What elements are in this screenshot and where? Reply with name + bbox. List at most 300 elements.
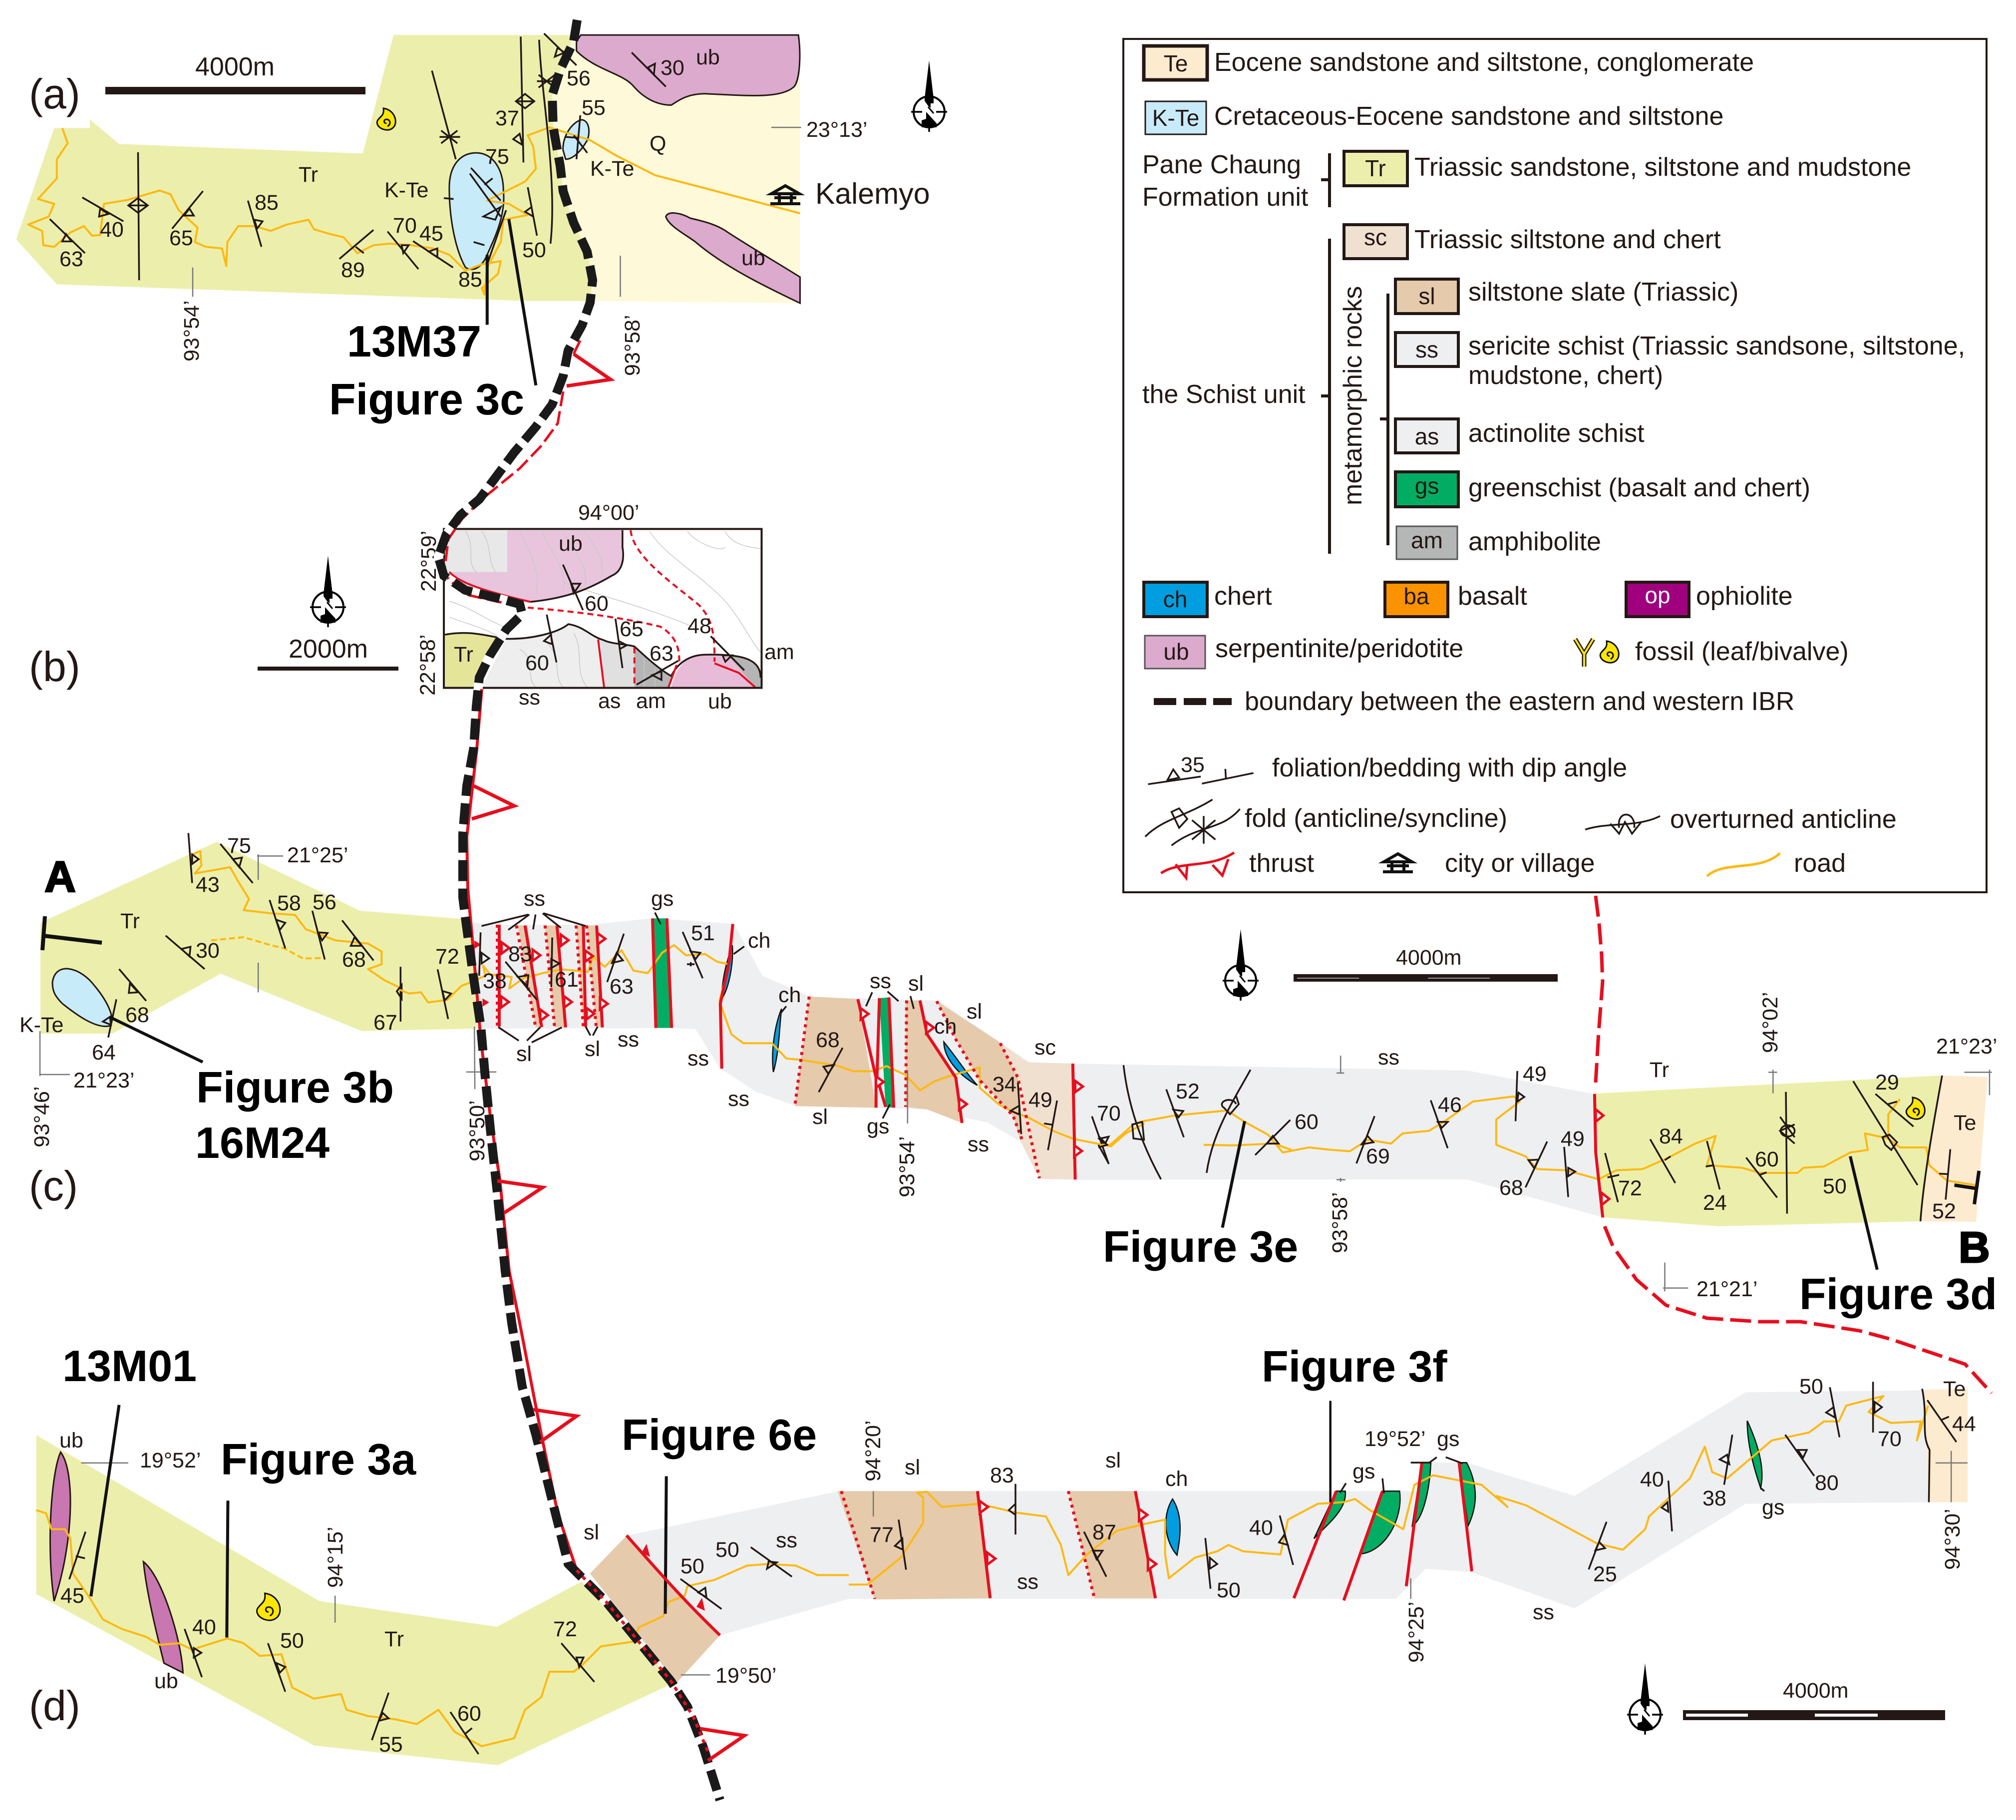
map labels (a): 93°54’ (180, 301, 204, 362)
white casing at inset (438, 452, 522, 707)
siltstone slate blocks (838, 1491, 1155, 1599)
icon: bivalve fossil (1600, 641, 1619, 663)
serpentinite lenses (50, 1452, 183, 1673)
map labels (d): gs (1762, 1495, 1784, 1519)
map labels (d): ss (1533, 1600, 1554, 1624)
map labels (d): 80 (1815, 1471, 1839, 1495)
map labels (a): ub (741, 246, 765, 270)
map labels (c): 43 (196, 873, 220, 897)
thrust teeth on main line (474, 941, 489, 1007)
map labels (c): 21°23’ (1936, 1035, 1997, 1059)
section end B (1955, 1171, 1979, 1204)
map labels (c): 60 (1295, 1110, 1319, 1134)
strike and dip symbols west (103, 833, 401, 1038)
map labels (d): 40 (1640, 1467, 1664, 1491)
legend text: Cretaceous-Eocene sandstone and siltstone (1214, 102, 1723, 131)
leader lines (1222, 1121, 1877, 1270)
map labels (a): 30 (661, 56, 684, 80)
swatch am (1396, 526, 1457, 559)
legend frame (1123, 39, 1987, 892)
map labels (c): 68 (342, 948, 366, 972)
solid thrusts (499, 918, 1075, 1179)
legend text: foliation/bedding with dip angle (1272, 753, 1627, 782)
section end A (42, 916, 102, 950)
map labels (b): as (598, 689, 621, 713)
swatch op: op (1645, 582, 1671, 608)
legend text: basalt (1458, 582, 1527, 611)
panel (c): central cross-section route (19, 833, 1997, 1319)
map labels (c): ss (1378, 1046, 1399, 1070)
map labels (c) (19, 834, 1997, 1301)
map labels (b): am (636, 689, 666, 713)
boundary between eastern and western IBR with thrust (438, 20, 744, 1800)
legend text: sericite schist (Triassic sandsone, siltstone, (1468, 332, 1965, 361)
serpentinite area (449, 530, 623, 602)
unit heading: the Schist unit (1142, 380, 1306, 409)
swatch K-Te (1145, 101, 1206, 134)
dashed faults (841, 1491, 1094, 1599)
map labels (c): ss (618, 1028, 639, 1052)
map labels (a): 56 (567, 66, 591, 90)
greenschist lenses (1314, 1421, 1762, 1554)
map labels (c): 49 (1561, 1127, 1585, 1151)
map labels (c): sl (908, 972, 924, 996)
symbol: thrust (1161, 852, 1234, 878)
siltstone and chert block (1001, 1043, 1075, 1179)
map labels (d): 19°50’ (715, 1664, 776, 1688)
Triassic area (445, 633, 506, 687)
panel label (a): (a) (29, 70, 80, 117)
map labels (c): 83 (508, 942, 532, 966)
map labels (a): 45 (419, 222, 443, 246)
map labels (c): sl (967, 1000, 982, 1024)
legend text: 35 (1181, 753, 1205, 777)
grid ticks and leader (40, 1031, 70, 1076)
map labels (d): sl (1105, 1449, 1121, 1472)
swatch ba (1385, 582, 1448, 617)
grid ticks (1337, 1056, 1992, 1291)
map labels (a): 55 (582, 96, 606, 120)
legend text: siltstone slate (Triassic) (1468, 278, 1738, 307)
legend text: thrust (1249, 849, 1315, 878)
icon: fossil bivalve (377, 108, 395, 130)
symbol: boundary dashes (1154, 698, 1232, 705)
map labels (d): 60 (457, 1702, 481, 1726)
Triassic area (36, 1435, 674, 1765)
swatch as (1395, 419, 1458, 453)
leader lines (487, 219, 536, 385)
map labels (c): 68 (125, 1003, 149, 1027)
map labels (d): 94°20’ (861, 1421, 885, 1481)
thrust teeth at Figure 6e block (642, 1544, 705, 1611)
map labels (c): 21°23’ (73, 1069, 134, 1092)
map labels (c): 68 (816, 1028, 840, 1052)
map labels (d): 19°52’ (1364, 1427, 1425, 1451)
map labels (c): sl (812, 1105, 828, 1129)
map labels (c): ss (728, 1087, 749, 1111)
map labels (c): 52 (1176, 1080, 1200, 1103)
map labels (a): K-Te (384, 178, 428, 202)
map labels (c): 49 (1028, 1088, 1052, 1112)
map labels (c): 70 (1097, 1101, 1121, 1125)
map labels (c): 69 (1366, 1144, 1390, 1168)
map labels (d): 50 (1799, 1375, 1823, 1399)
map labels (d): ch (1165, 1467, 1188, 1491)
legend text: fossil (leaf/bivalve) (1635, 637, 1849, 666)
map labels (c): ss (524, 887, 545, 911)
swatch gs (1395, 472, 1458, 507)
strike and dip symbols (544, 565, 744, 685)
panel label (c): (c) (29, 1162, 78, 1209)
map labels (a): 93°58’ (621, 315, 645, 376)
map labels (d): 77 (870, 1523, 894, 1547)
map labels (a): 75 (485, 145, 509, 169)
map labels (c): 38 (483, 969, 507, 993)
map labels (c): 94°02’ (1758, 992, 1782, 1053)
map labels (c): 34 (993, 1073, 1016, 1096)
map labels (d) (59, 1375, 1976, 1757)
panel (a): northern route map (16, 33, 947, 424)
map labels (c): Tr (120, 909, 140, 933)
leader lines panel d (91, 1405, 667, 1638)
map labels (a): 37 (495, 106, 519, 130)
thrust east (1595, 1094, 1603, 1217)
legend text: overturned anticline (1670, 805, 1897, 834)
map labels (d): sl (584, 1520, 599, 1544)
figure label 6e: Figure 6e (622, 1410, 817, 1459)
map labels (c): 93°46’ (30, 1087, 54, 1147)
map labels (c): 60 (1755, 1147, 1779, 1171)
strike and dip symbols (50, 33, 666, 280)
scale bar 4000m (105, 52, 365, 94)
legend text: chert (1214, 582, 1272, 611)
map labels (d): 38 (1702, 1486, 1726, 1510)
sample label 16M24: 16M24 (195, 1118, 330, 1167)
siltstone slate block (590, 1535, 720, 1683)
chert lens (1166, 1499, 1180, 1555)
K-Te lens (52, 969, 112, 1027)
figure label 3f: Figure 3f (1262, 1342, 1447, 1391)
Quaternary area (552, 35, 800, 303)
map labels (d): 50 (280, 1629, 304, 1653)
inset frame (444, 529, 761, 688)
map labels (d): sl (905, 1456, 920, 1479)
swatch ub: ub (1163, 639, 1189, 665)
symbol: road (1707, 853, 1780, 876)
map labels (d): gs (1437, 1427, 1459, 1451)
leader Figure 3b (110, 1017, 203, 1062)
map labels (c): 21°25’ (287, 843, 348, 867)
map labels (c): 68 (1499, 1176, 1523, 1200)
legend text: boundary between the eastern and western IBR (1245, 687, 1794, 716)
amphibolite area (635, 648, 760, 687)
map labels (c): ch (748, 929, 770, 953)
map labels (c): 67 (373, 1011, 397, 1035)
vertical heading: metamorphic rocks (1339, 286, 1367, 505)
leader line Figure 3f (1329, 1401, 1332, 1502)
swatch am: am (1411, 527, 1443, 553)
swatch sc: sc (1364, 224, 1387, 250)
map labels (d): 40 (192, 1615, 216, 1639)
map labels (d): ub (154, 1669, 178, 1693)
swatch as: as (1415, 423, 1439, 449)
actinolite schist area (601, 640, 635, 687)
legend text: Triassic siltstone and chert (1414, 225, 1721, 254)
map labels (c): sl (585, 1037, 600, 1061)
swatch ba: ba (1403, 583, 1429, 609)
legend text: Eocene sandstone and siltstone, conglomerate (1214, 48, 1754, 77)
bracket lines (1321, 153, 1388, 554)
map labels (c): 93°54’ (895, 1136, 919, 1197)
panel (d): southern route map (29, 1341, 1976, 1765)
map labels (c): 49 (1523, 1062, 1547, 1086)
thrust teeth (980, 1501, 1156, 1570)
panel (b): inset map (29, 501, 794, 714)
map labels (b): 22°58’ (416, 635, 440, 696)
panel label (d): (d) (29, 1682, 80, 1729)
icon: fossil bivalve (1906, 1097, 1925, 1119)
map labels (d): 87 (1092, 1520, 1116, 1544)
map labels (c): ss (870, 969, 891, 993)
road east (1098, 1096, 1979, 1185)
sample label 13M01: 13M01 (62, 1341, 197, 1391)
road central (399, 945, 1144, 1146)
symbol: fold (1145, 799, 1240, 845)
map labels (b) (416, 501, 794, 714)
legend text: greenschist (basalt and chert) (1468, 473, 1810, 502)
figure label 3b: Figure 3b (196, 1063, 394, 1112)
sericite schist area (482, 624, 605, 687)
schist belt (627, 1391, 1928, 1635)
chert lenses (722, 945, 977, 1085)
symbol: foliation and bedding (1148, 769, 1254, 784)
dashed faults (497, 925, 1039, 1178)
topographic contours (449, 531, 760, 687)
map labels (d): Te (1943, 1377, 1966, 1401)
swatch ss (1395, 333, 1458, 366)
map labels (c): Tr (1650, 1058, 1669, 1082)
map labels (c): 58 (277, 891, 301, 915)
map labels (b): 60 (525, 651, 549, 675)
map labels (d): 94°15’ (324, 1527, 347, 1588)
map labels (c): ch (934, 1015, 957, 1039)
map labels (d): 94°25’ (1404, 1602, 1428, 1663)
road west (36, 1510, 849, 1746)
map labels (d): 83 (990, 1463, 1014, 1487)
map labels (c): gs (651, 887, 673, 911)
swatch sc (1344, 224, 1407, 259)
legend text: city or village (1445, 849, 1595, 878)
swatch ss: ss (1415, 337, 1438, 363)
legend text: mudstone, chert) (1468, 361, 1663, 390)
scale bar 2000m (258, 635, 398, 671)
map labels (d): 50 (680, 1554, 704, 1578)
map labels (b): ss (519, 686, 540, 710)
map labels (a): K-Te (590, 157, 634, 181)
icon: fossil bivalve (257, 1593, 280, 1620)
strike and dip symbols west (69, 1532, 792, 1754)
map labels (b): 94°00’ (578, 501, 639, 525)
map labels (a): 23°13’ (806, 118, 867, 142)
map labels (a): ub (696, 45, 720, 69)
figure label 3d: Figure 3d (1799, 1269, 1997, 1319)
map labels (b): ub (708, 690, 732, 714)
swatch ch (1144, 582, 1207, 617)
dotted thrust over boundary (577, 1570, 709, 1754)
map labels (b): 22°59’ (417, 531, 441, 592)
map labels (d): ss (776, 1528, 797, 1552)
icon: north arrow (1627, 1663, 1663, 1735)
icon: north arrow (1223, 929, 1259, 1001)
map labels (d): 44 (1952, 1412, 1976, 1436)
strike and dip symbols central (438, 932, 1109, 1164)
map labels (a): 65 (169, 226, 193, 250)
map labels (c): Te (1954, 1111, 1976, 1135)
panel label (b): (b) (29, 643, 80, 690)
map labels (d): ss (1017, 1570, 1038, 1594)
solid thrusts (978, 1462, 1472, 1600)
large thrust teeth (472, 354, 744, 1761)
legend text: fold (anticline/syncline) (1245, 804, 1507, 833)
map labels (c): gs (867, 1114, 889, 1138)
scale bar 4000m: 4000m (1396, 946, 1461, 970)
legend text (1468, 332, 1965, 390)
Triassic area west (40, 842, 477, 1034)
map labels (d): 94°30’ (1941, 1509, 1965, 1570)
faults in inset (528, 530, 714, 687)
map labels (b): 60 (585, 592, 609, 616)
map labels (c): sc (1034, 1036, 1056, 1060)
figure label 3e: Figure 3e (1103, 1222, 1298, 1271)
map labels (a): 85 (255, 191, 279, 215)
place name: Kalemyo (815, 177, 930, 210)
greenschist bands (653, 918, 894, 1107)
map labels (d): 70 (1878, 1427, 1902, 1451)
map labels (d): 40 (1249, 1516, 1273, 1540)
swatch Tr: Tr (1365, 155, 1386, 181)
map labels (d): 72 (553, 1617, 577, 1641)
road east (849, 1396, 1928, 1585)
dashed red fault east (1596, 896, 1992, 1393)
label leader lines (482, 913, 914, 1118)
map labels (c): 52 (1932, 1199, 1956, 1223)
label leader lines (1340, 1457, 1764, 1493)
strike and dip symbols east (1098, 1065, 1950, 1221)
Triassic area east (1595, 1076, 1941, 1226)
map labels (a): 40 (100, 218, 124, 242)
map labels (a): 85 (458, 268, 482, 292)
scale bar 4000m: 4000m (1783, 1679, 1848, 1703)
scale bar 4000m (1683, 1679, 1945, 1720)
unit heading: Pane Chaung (1142, 150, 1301, 179)
icon: city Kalemyo (770, 186, 800, 204)
map labels (c): ch (778, 983, 801, 1007)
schist belt (471, 918, 1603, 1217)
grid ticks (81, 1463, 710, 1675)
thrust teeth east (1596, 1109, 1609, 1205)
swatch gs: gs (1415, 473, 1439, 499)
map labels (d): 50 (1217, 1578, 1241, 1602)
map labels (b): 65 (620, 617, 644, 641)
map labels (b): 63 (650, 642, 673, 666)
map labels (c): 29 (1875, 1071, 1899, 1094)
icon: city or village (1383, 854, 1413, 872)
panel: legend (1123, 39, 1987, 892)
map labels (c): 50 (1823, 1174, 1847, 1198)
map labels (c): 72 (1618, 1176, 1642, 1200)
map labels (a): Q (650, 132, 666, 156)
map labels (d): 25 (1593, 1562, 1617, 1586)
road branches (1204, 1099, 1900, 1150)
thrust solid trace (467, 689, 577, 1570)
map labels (c): 46 (1438, 1093, 1462, 1117)
unit heading: Formation unit (1142, 183, 1309, 212)
legend text: amphibolite (1468, 527, 1601, 556)
legend text: actinolite schist (1468, 419, 1645, 448)
grid ticks (257, 854, 283, 992)
map labels (c): 56 (313, 890, 336, 914)
swatch Te: Te (1164, 50, 1188, 76)
lower serpentinite area (671, 655, 755, 687)
swatch K-Te: K-Te (1152, 105, 1199, 131)
legend text: ophiolite (1696, 582, 1793, 611)
map labels (c): sl (516, 1042, 532, 1066)
map labels (c): 84 (1659, 1124, 1683, 1148)
grey topographic block (445, 530, 507, 572)
map labels (c): 93°58’ (1328, 1192, 1352, 1253)
figure label 3c: Figure 3c (329, 374, 524, 424)
map labels (c): 63 (610, 975, 634, 999)
section letter A: A (44, 853, 76, 901)
swatch Te (1144, 46, 1207, 80)
scale bar 4000m: 4000m (195, 52, 275, 81)
map labels (c): 51 (691, 921, 715, 945)
icon: leaf fossil (1575, 639, 1593, 667)
grid ticks (193, 127, 801, 297)
map labels (c): ss (687, 1047, 709, 1071)
map labels (a): 50 (522, 238, 546, 262)
map labels (a): 63 (59, 247, 83, 271)
map labels (b): ub (559, 532, 583, 556)
map labels (c): 30 (196, 939, 220, 963)
map labels (c): ss (968, 1132, 989, 1156)
legend text: serpentinite/peridotite (1215, 634, 1463, 663)
map labels (c): 24 (1703, 1191, 1727, 1215)
swatch sl (1395, 279, 1458, 314)
map labels (a): 89 (341, 258, 365, 282)
thrust teeth (501, 933, 1083, 1156)
boundary lines (445, 530, 760, 678)
north thrust dashed (444, 341, 580, 607)
legend text: road (1794, 849, 1846, 878)
map labels (b): Tr (454, 643, 473, 667)
map labels (b): 48 (687, 614, 711, 638)
map labels (d): 45 (60, 1584, 84, 1608)
map labels (d): Tr (384, 1627, 404, 1651)
map labels (c): 75 (227, 834, 251, 858)
map labels (c): 93°50’ (465, 1100, 489, 1161)
map labels (c): K-Te (19, 1013, 63, 1037)
thrust at Figure 6e block (627, 1535, 720, 1635)
Eocene area (1921, 1076, 1988, 1222)
Cretaceous-Eocene lenses (449, 120, 589, 269)
swatch sl: sl (1418, 283, 1435, 309)
icon: north arrow (310, 556, 346, 627)
strike and dip symbols east (895, 1382, 1957, 1589)
dashed road (211, 937, 325, 959)
map labels (c): 21°21’ (1696, 1277, 1757, 1301)
road (28, 127, 800, 295)
